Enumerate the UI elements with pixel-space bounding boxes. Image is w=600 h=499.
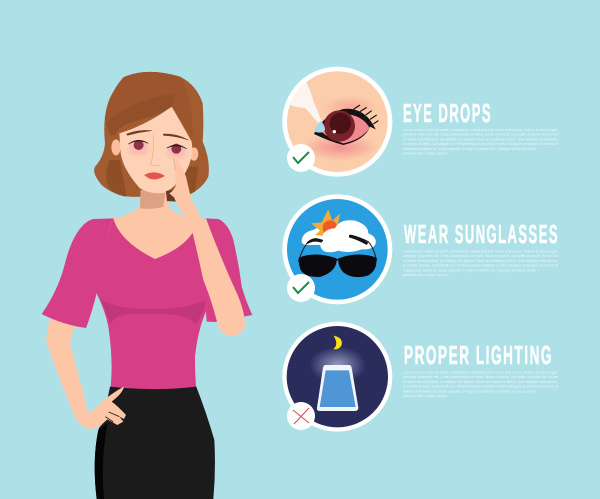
- eye drop: [315, 121, 325, 133]
- text block: eye drops: Lorem ipsum dolor sit amet, consectetur adipiscing elit. Nunc erat purus, finibus at lacus eget,: [403, 127, 558, 132]
- glasses arms: [298, 235, 377, 262]
- text block: eye drops: malesuada fames ac turpis egestas. In eget hendrerit est. Quisque vel lacus amet: [403, 146, 536, 151]
- text block: eye drops: pulvinar pharetra elit. Cras malesuada mi vitae lacus rhoncus, convallis suscipit dui vel mi: [403, 132, 558, 137]
- moon: [333, 336, 342, 349]
- text block: wear sunglasses: sit amet sem tincidunt, ac efficitur dui aliquet. Nunc ac maximus lectus. Duis dapibus felis ipsum,: [403, 258, 558, 263]
- text block: wear sunglasses: in mollis at felis, sollicitudin in. Pellentesque habitant morbi tristique senectus et netus et: [403, 263, 559, 268]
- text block: proper lighting: malesuada fames ac turpis egestas. In eget hendrerit est. Quisque vel lacus amet: [403, 388, 536, 393]
- text block: proper lighting: in mollis at felis, sollicitudin in. Pellentesque habitant morbi tristique senectus et netus et: [403, 384, 559, 389]
- text block: wear sunglasses: Lorem ipsum dolor sit amet, consectetur adipiscing elit. Nunc erat purus, finibus at lacus eget,: [403, 248, 558, 254]
- woman figure: [42, 72, 252, 499]
- face: [119, 107, 192, 193]
- right forearm: [192, 218, 245, 336]
- hair fringe band: [106, 93, 175, 135]
- lashes: [353, 105, 378, 124]
- back cloud: [302, 228, 322, 245]
- neck: [113, 192, 180, 219]
- left eye redness: [124, 142, 152, 158]
- left eye: [128, 140, 148, 152]
- ears: [111, 139, 121, 155]
- body and clothing: [42, 198, 252, 499]
- panel: eye drops: EYE DROPS: [403, 98, 492, 128]
- screen glow: [309, 347, 366, 383]
- right brow arm: [349, 235, 368, 245]
- right eyebrow: [163, 134, 188, 140]
- text block: wear sunglasses: [403, 248, 559, 277]
- left arm: [46, 318, 103, 429]
- left iris: [134, 140, 144, 150]
- icon: sunglasses circle: [282, 194, 392, 304]
- redness around eye: [308, 138, 374, 159]
- skirt: [95, 386, 215, 499]
- pink top torso: [97, 218, 212, 389]
- bridge: [335, 258, 340, 263]
- phone screen: [320, 370, 356, 407]
- iris: [324, 110, 355, 142]
- right ear: [190, 147, 198, 161]
- text block: eye drops: [403, 127, 559, 156]
- eye highlight: [333, 130, 336, 133]
- badge: check: [287, 274, 315, 302]
- eye outline: [314, 109, 376, 145]
- text block: proper lighting: sit amet sem tincidunt, ac efficitur dui aliquet. Nunc ac maximus lectus. Duis dapibus felis ipsum,: [403, 379, 558, 384]
- phone: [317, 365, 358, 411]
- tear track: [173, 158, 175, 170]
- dropper: [290, 82, 322, 124]
- icon: phone at night circle: [282, 322, 392, 432]
- hand dark gap: [166, 189, 177, 202]
- left upper lid: [128, 140, 148, 144]
- right iris: [171, 144, 181, 154]
- finger lines: [105, 412, 119, 422]
- icon: eye drops circle: [282, 67, 392, 177]
- text block: wear sunglasses: malesuada fames ac turpis egestas. In eget hendrerit est. Quisque vel lacus amet: [403, 267, 536, 272]
- panel: eye drops: [282, 67, 559, 177]
- text block: wear sunglasses: pulvinar elit a ornare ipsum.: [403, 272, 448, 277]
- badge: cross: [287, 402, 315, 430]
- hand on hip: [88, 387, 126, 428]
- text block: eye drops: in mollis at felis, sollicitudin in. Pellentesque habitant morbi tristique senectus et netus et: [403, 141, 559, 146]
- pupil: [330, 113, 351, 134]
- right eye redness: [163, 145, 190, 161]
- badge: check: [287, 144, 315, 172]
- left lens: [299, 254, 337, 277]
- right lens: [338, 254, 376, 277]
- sun: [311, 210, 340, 236]
- text block: eye drops: sit amet sem tincidunt, ac efficitur dui aliquet. Nunc ac maximus lectus. Duis dapibus felis ipsum,: [403, 136, 558, 141]
- text block: wear sunglasses: pulvinar pharetra elit. Cras malesuada mi vitae lacus rhoncus, convallis suscipit dui vel mi: [403, 253, 558, 258]
- nose: [151, 135, 160, 166]
- sclera: [322, 114, 370, 143]
- left brow arm: [307, 238, 323, 244]
- hair shadow: [106, 160, 198, 200]
- chest and neck skin: [110, 198, 197, 263]
- panel: wear sunglasses: [282, 194, 559, 304]
- text block: eye drops: pulvinar elit a ornare ipsum.: [403, 150, 448, 156]
- text block: proper lighting: pulvinar elit a ornare ipsum.: [403, 393, 448, 398]
- head: [94, 72, 209, 233]
- right upper lid: [167, 145, 187, 149]
- back hair: [94, 72, 209, 202]
- hair top: [105, 72, 193, 140]
- front cloud: [320, 220, 376, 252]
- text block: proper lighting: Lorem ipsum dolor sit amet, consectetur adipiscing elit. Nunc erat purus, finibus at lacus eget,: [403, 370, 558, 374]
- skirt side shadow: [95, 423, 107, 499]
- right sleeve: [205, 218, 252, 322]
- upper redness: [328, 98, 372, 114]
- text block: proper lighting: [403, 370, 559, 398]
- left sleeve: [42, 218, 113, 328]
- right eye: [167, 145, 187, 154]
- shirt bust shadow: [100, 298, 207, 325]
- neck shadow: [140, 190, 166, 209]
- raised hand: [169, 158, 206, 233]
- left eyebrow: [127, 130, 152, 135]
- mouth: [144, 172, 165, 179]
- panel: proper lighting: [282, 322, 559, 432]
- sun core: [322, 220, 337, 232]
- text block: proper lighting: pulvinar pharetra elit. Cras malesuada mi vitae lacus rhoncus, convallis suscipit dui vel mi: [403, 374, 558, 379]
